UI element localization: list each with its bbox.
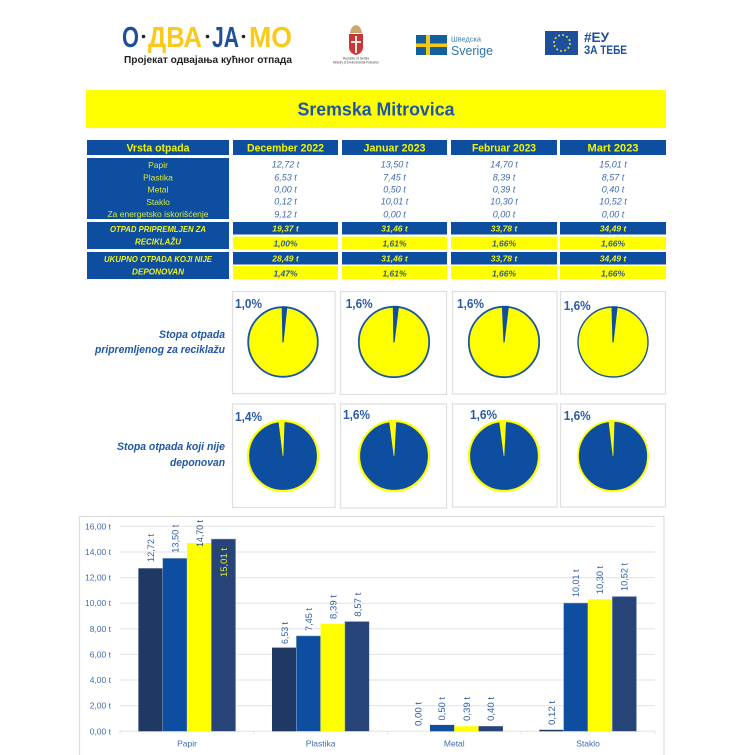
- bars: Metal: 0,00 t: [414, 701, 424, 726]
- bars: Plastika: 7,45 t: [304, 608, 314, 631]
- logo: Sweden: Шведска: [451, 34, 482, 44]
- table header row: Vrsta otpada: [126, 142, 190, 154]
- waste amounts: 0,00 t: [602, 210, 625, 220]
- bars: Staklo: 10,01 t: [571, 569, 581, 597]
- y axis labels: 16,00 t: [85, 522, 112, 532]
- logo: EU za tebe: ЗА ТЕБЕ: [584, 43, 627, 57]
- table header row: Februar 2023: [472, 142, 536, 154]
- y axis labels: 2,00 t: [90, 700, 112, 710]
- row: total waste not landfilled: 31,46 t: [381, 254, 409, 264]
- waste amounts: 0,00 t: [274, 184, 297, 194]
- pie chart: not landfilled December 2022: [232, 404, 335, 508]
- bars: Papir: 13,50 t: [170, 524, 180, 553]
- pie chart: not landfilled February 2023: [452, 404, 557, 507]
- bars: Staklo: [539, 563, 636, 731]
- y axis labels: 10,00 t: [85, 598, 112, 608]
- y axis labels: [85, 522, 112, 736]
- bars: Metal: 0,40 t: [486, 696, 496, 721]
- waste amounts: 8,39 t: [493, 172, 516, 182]
- logo: Odvajamo project: МО: [249, 22, 292, 54]
- row: total waste not landfilled: 34,49 t: [600, 254, 627, 264]
- row: waste prepared for recycling: 1,66%: [601, 238, 625, 248]
- label: recycling rate: Stopa otpada: [159, 329, 225, 341]
- waste amounts: 12,72 t: [272, 160, 300, 170]
- y axis labels: 14,00 t: [85, 547, 112, 557]
- waste amounts: 0,12 t: [274, 196, 297, 206]
- bars: Plastika: [272, 592, 369, 731]
- bars: Metal: [414, 696, 503, 731]
- waste amounts: [272, 160, 627, 220]
- row: total waste not landfilled: 1,66%: [492, 268, 516, 278]
- waste type labels: Za energetsko iskorišćenje: [108, 209, 209, 219]
- pie chart: recycling February 2023: 1,6%: [457, 296, 484, 311]
- logo: Republic of Serbia ministry crest: Ministry of Environmental Protection: [333, 60, 379, 64]
- logo: Sweden: Sverige: [451, 43, 493, 58]
- pie chart: recycling March 2023: [560, 292, 666, 394]
- logo: Odvajamo project: О: [122, 22, 139, 54]
- pie chart: not landfilled March 2023: [560, 404, 666, 507]
- waste amounts: 14,70 t: [490, 160, 518, 170]
- bars: Metal: 0,50 t: [437, 696, 447, 720]
- logo: Odvajamo project: ДВА: [148, 22, 202, 54]
- logo: EU za tebe: #ЕУ: [584, 29, 609, 45]
- bars: Papir: 12,72 t: [146, 534, 156, 562]
- row: waste prepared for recycling: 31,46 t: [381, 224, 409, 234]
- waste amounts: 10,52 t: [599, 196, 627, 206]
- table header row: Mart 2023: [588, 142, 638, 154]
- pie chart: not landfilled December 2022: 1,4%: [235, 409, 262, 424]
- category labels: Papir: [177, 738, 197, 748]
- row: waste prepared for recycling: RECIKLAŽU: [135, 236, 182, 246]
- waste amounts: 0,00 t: [383, 210, 406, 220]
- pie chart: recycling March 2023: 1,6%: [564, 298, 591, 313]
- bars: Staklo: 10,52 t: [620, 563, 630, 591]
- waste amounts: 0,50 t: [383, 184, 406, 194]
- table header row: Januar 2023: [364, 142, 426, 154]
- pie chart: not landfilled March 2023: 1,6%: [564, 408, 591, 423]
- logo: EU za tebe: [545, 29, 627, 57]
- bars: Papir: 14,70 t: [195, 520, 205, 547]
- bar chart: waste by type and month: [80, 516, 664, 755]
- bars: Plastika: 6,53 t: [280, 622, 290, 644]
- row: total waste not landfilled: 33,78 t: [491, 254, 518, 264]
- logo: Odvajamo project: [122, 22, 292, 66]
- row: waste prepared for recycling: [87, 222, 666, 249]
- pie chart: recycling January 2023: 1,6%: [346, 296, 373, 311]
- pie chart: recycling February 2023: [452, 292, 557, 394]
- data table: [87, 140, 666, 279]
- waste type labels: [87, 158, 229, 219]
- row: total waste not landfilled: 28,49 t: [271, 254, 300, 264]
- row: waste prepared for recycling: 33,78 t: [491, 224, 518, 234]
- waste amounts: 9,12 t: [274, 210, 297, 220]
- bars: Staklo: 10,30 t: [595, 566, 605, 594]
- logo: Odvajamo project: ЈА: [212, 22, 239, 54]
- row: total waste not landfilled: 1,61%: [382, 268, 407, 278]
- pie chart: recycling December 2022: 1,0%: [235, 296, 262, 311]
- bars: Metal: 0,39 t: [462, 696, 472, 721]
- waste amounts: 0,40 t: [602, 184, 625, 194]
- row: total waste not landfilled: DEPONOVAN: [132, 266, 185, 276]
- title banner: [86, 90, 666, 128]
- pie chart: not landfilled February 2023: 1,6%: [470, 407, 497, 422]
- row: waste prepared for recycling: 1,66%: [492, 238, 516, 248]
- y axis labels: 6,00 t: [90, 650, 112, 660]
- category labels: Plastika: [306, 738, 336, 748]
- waste type labels: Staklo: [146, 197, 170, 207]
- waste amounts: 10,30 t: [490, 196, 518, 206]
- pie chart: not landfilled January 2023: 1,6%: [343, 407, 370, 422]
- bars: Papir: 15,01 t: [219, 547, 229, 577]
- row: total waste not landfilled: [87, 252, 666, 279]
- waste amounts: 6,53 t: [274, 172, 297, 182]
- label: recycling rate: [94, 329, 225, 356]
- waste type labels: Plastika: [143, 172, 173, 182]
- category labels: Metal: [444, 738, 465, 748]
- waste amounts: 10,01 t: [381, 196, 409, 206]
- label: non-landfilled rate: Stopa otpada koji nije: [117, 441, 225, 453]
- waste amounts: 0,39 t: [493, 184, 516, 194]
- waste amounts: 13,50 t: [381, 160, 409, 170]
- table header row: [87, 140, 666, 155]
- category labels: Staklo: [576, 738, 600, 748]
- label: recycling rate: pripremljenog za reciklažu: [94, 344, 225, 356]
- title banner: Sremska Mitrovica: [298, 100, 455, 120]
- row: waste prepared for recycling: 1,61%: [382, 238, 407, 248]
- row: total waste not landfilled: UKUPNO OTPADA KOJI NIJE: [104, 254, 212, 264]
- waste type labels: Papir: [148, 160, 168, 170]
- waste type labels: Metal: [148, 184, 168, 194]
- y axis labels: 0,00 t: [90, 726, 112, 736]
- row: waste prepared for recycling: 1,00%: [273, 238, 298, 248]
- y axis labels: 8,00 t: [90, 624, 112, 634]
- y axis labels: 12,00 t: [85, 572, 112, 582]
- bars: Plastika: 8,39 t: [329, 594, 339, 619]
- row: waste prepared for recycling: 19,37 t: [272, 224, 300, 234]
- row: waste prepared for recycling: OTPAD PRIPREMLJEN ZA: [110, 224, 206, 234]
- label: non-landfilled rate: [117, 441, 225, 469]
- waste amounts: 15,01 t: [599, 160, 627, 170]
- logo: Republic of Serbia ministry crest: Republic of Serbia: [343, 56, 369, 60]
- logo: Sweden: [416, 34, 493, 58]
- waste amounts: 7,45 t: [383, 172, 406, 182]
- waste amounts: 0,00 t: [493, 210, 516, 220]
- row: total waste not landfilled: 1,66%: [601, 268, 625, 278]
- pie chart: not landfilled January 2023: [340, 404, 446, 508]
- waste amounts: 8,57 t: [602, 172, 625, 182]
- logo: Odvajamo project: Пројекат одвајања кућног отпада: [124, 54, 292, 66]
- table header row: December 2022: [247, 142, 324, 154]
- y axis labels: 4,00 t: [90, 675, 112, 685]
- logo: Republic of Serbia ministry crest: [333, 25, 379, 64]
- row: total waste not landfilled: 1,47%: [273, 268, 298, 278]
- pie chart: recycling January 2023: [340, 292, 446, 394]
- bars: Papir: [138, 520, 236, 731]
- bars: Staklo: 0,12 t: [547, 700, 557, 725]
- bars: Plastika: 8,57 t: [353, 592, 363, 617]
- row: waste prepared for recycling: 34,49 t: [600, 224, 627, 234]
- category labels: [177, 738, 600, 748]
- label: non-landfilled rate: deponovan: [170, 457, 225, 469]
- pie chart: recycling December 2022: [232, 292, 335, 394]
